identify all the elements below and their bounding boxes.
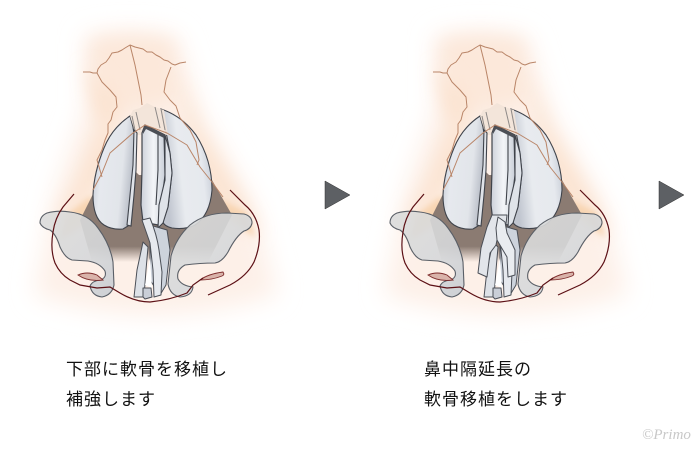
arrow 2 — [659, 181, 684, 209]
nose diagram: cartilage graft — [34, 30, 278, 315]
caption left: 下部に軟骨を移植し — [66, 360, 228, 379]
nose diagram: septal extension — [384, 30, 628, 315]
lower strut grafts — [134, 218, 170, 299]
septal extension grafts — [478, 215, 520, 299]
copyright: ©Primo — [642, 427, 691, 443]
arrow 1 — [325, 181, 350, 209]
caption right — [424, 360, 568, 409]
caption left — [66, 360, 228, 409]
caption right: 鼻中隔延長の — [424, 360, 532, 379]
caption left: 補強します — [66, 390, 156, 409]
caption right: 軟骨移植をします — [424, 390, 568, 409]
